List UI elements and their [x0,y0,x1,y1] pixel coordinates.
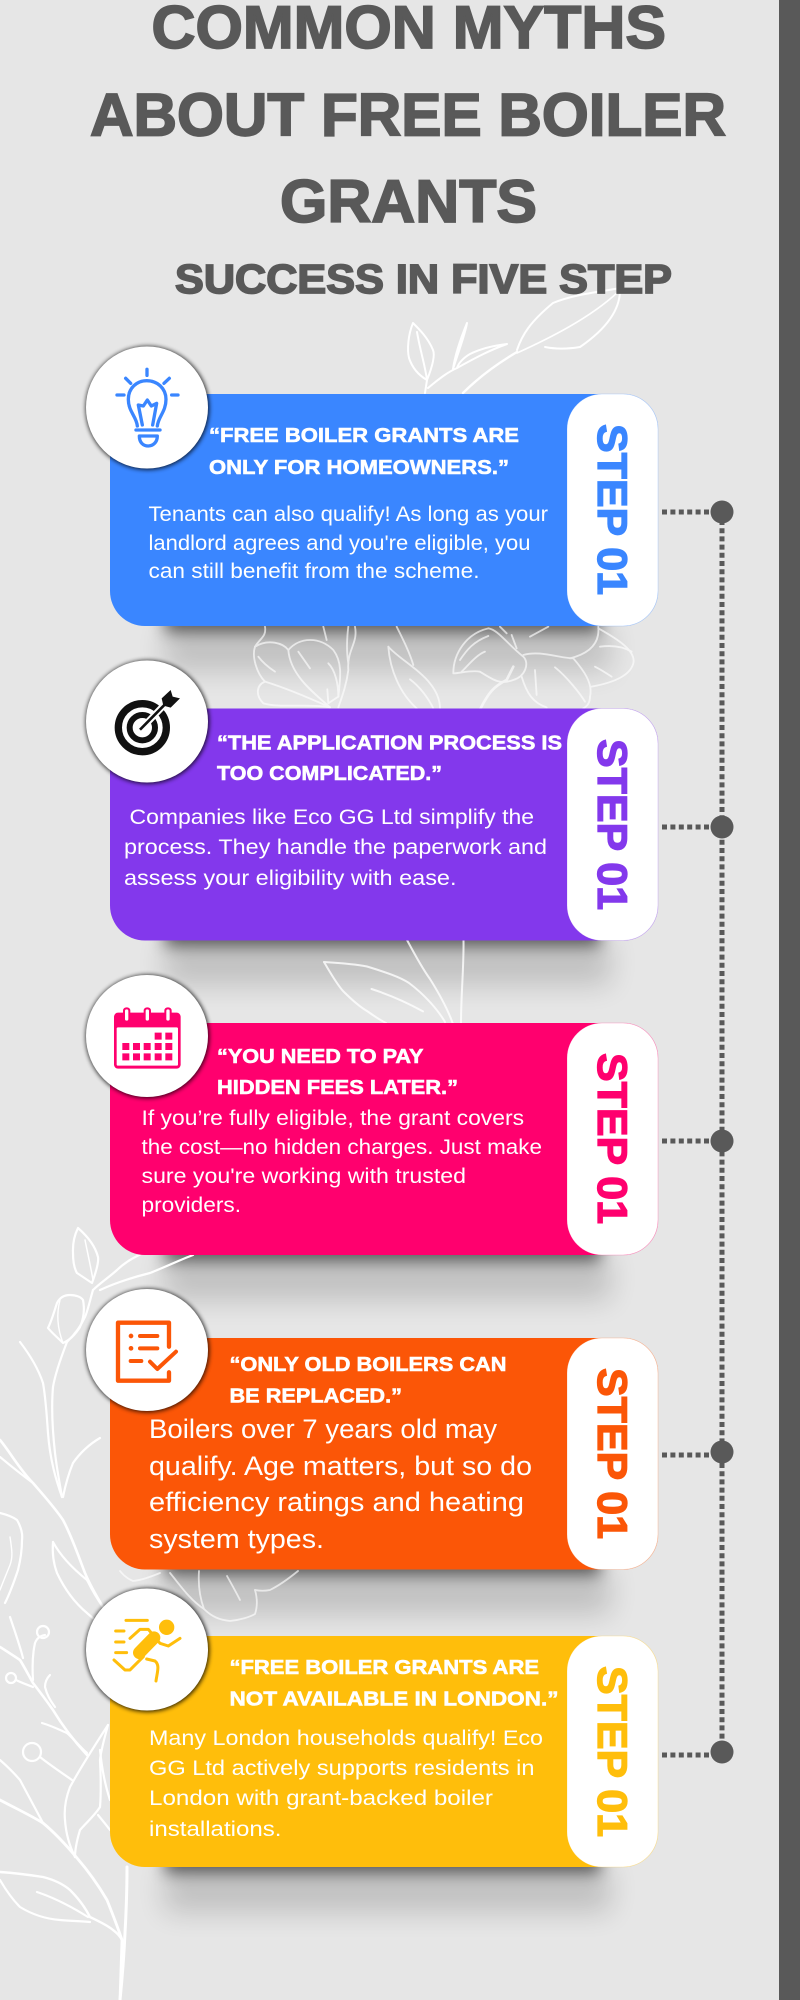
myth body 4: qualify. Age matters, but so do [149,1451,532,1481]
myth heading 5 [230,1656,558,1710]
step tab 2: STEP 01 [589,739,636,910]
myth heading 5: NOT AVAILABLE IN LONDON.” [230,1688,558,1710]
card drop shadows [165,604,610,1912]
myth body 3: If you’re fully eligible, the grant covers [142,1107,524,1130]
myth heading 1 [209,424,519,479]
myth body 3: sure you're working with trusted [142,1165,466,1188]
panel: myth 2 application [110,708,658,940]
step tab 5 [567,1636,658,1867]
myth body 2: assess your eligibility with ease. [124,867,456,890]
myth body 5: London with grant-backed boiler [149,1787,493,1810]
title: GRANTS [280,168,537,235]
myth heading 2 [217,732,562,785]
myth heading 1: “FREE BOILER GRANTS ARE [209,424,519,447]
myth body 5: Many London households qualify! Eco [149,1727,543,1750]
right dark side bar [779,0,800,2000]
icon badge: runner [86,1588,210,1712]
myth body 4: Boilers over 7 years old may [149,1414,498,1444]
step tab 3: STEP 01 [589,1053,636,1224]
step tab 4: STEP 01 [589,1368,636,1539]
step tab 3 [567,1023,658,1255]
myth heading 4: BE REPLACED.” [230,1384,402,1408]
floral decoration: flowers between cards one and two [254,627,634,708]
icon badge: calendar [86,974,210,1098]
title: ABOUT FREE BOILER [90,82,726,148]
myth body 5 [149,1727,543,1841]
myth body 1: landlord agrees and you're eligible, you [148,532,530,555]
myth body 1: can still benefit from the scheme. [148,560,480,583]
myth body 2 [124,806,547,890]
myth body 4: system types. [149,1524,324,1554]
myth heading 4: “ONLY OLD BOILERS CAN [230,1353,506,1376]
icon badge: target [86,660,210,784]
myth body 5: installations. [149,1818,282,1841]
myth heading 2: TOO COMPLICATED.” [217,762,442,785]
myth heading 1: ONLY FOR HOMEOWNERS.” [209,456,509,479]
myth body 4: efficiency ratings and heating [149,1487,524,1517]
myth body 1 [148,503,548,583]
myth body 3: the cost—no hidden charges. Just make [142,1136,542,1159]
step tab 1 [567,394,658,626]
myth heading 4 [230,1353,506,1408]
subtitle: SUCCESS IN FIVE STEP [175,256,672,302]
myth body 2: process. They handle the paperwork and [124,836,547,859]
myth body 3 [142,1107,542,1217]
myth body 1: Tenants can also qualify! As long as your [148,503,548,526]
panel: myth 3 hidden fees [110,1023,658,1255]
step tab 4 [567,1338,658,1570]
step tab 1: STEP 01 [589,424,636,595]
myth body 5: GG Ltd actively supports residents in [149,1757,534,1780]
icon badge: light bulb [86,346,210,470]
myth body 4 [149,1414,532,1554]
icon badge: checklist [86,1288,210,1412]
step tab 2 [567,708,658,940]
timeline [662,500,734,1764]
title [90,0,726,235]
step tab 5: STEP 01 [589,1666,636,1837]
floral decoration: flower between cards four and five [120,1571,298,1621]
myth heading 3: HIDDEN FEES LATER.” [217,1076,458,1099]
myth heading 3 [217,1045,458,1099]
myth body 3: providers. [142,1194,241,1217]
myth body 2: Companies like Eco GG Ltd simplify the [130,806,534,829]
floral decoration: branch between cards two and three [324,940,464,1023]
myth heading 2: “THE APPLICATION PROCESS IS [217,732,562,754]
panel: myth 1 homeowners [110,394,658,626]
panel: myth 4 old boilers [110,1338,658,1570]
panel: myth 5 london [110,1636,658,1867]
floral decoration: left branch [0,1228,193,2000]
myth heading 3: “YOU NEED TO PAY [217,1045,424,1068]
myth heading 5: “FREE BOILER GRANTS ARE [230,1656,539,1679]
floral decoration: top branch [408,288,620,393]
